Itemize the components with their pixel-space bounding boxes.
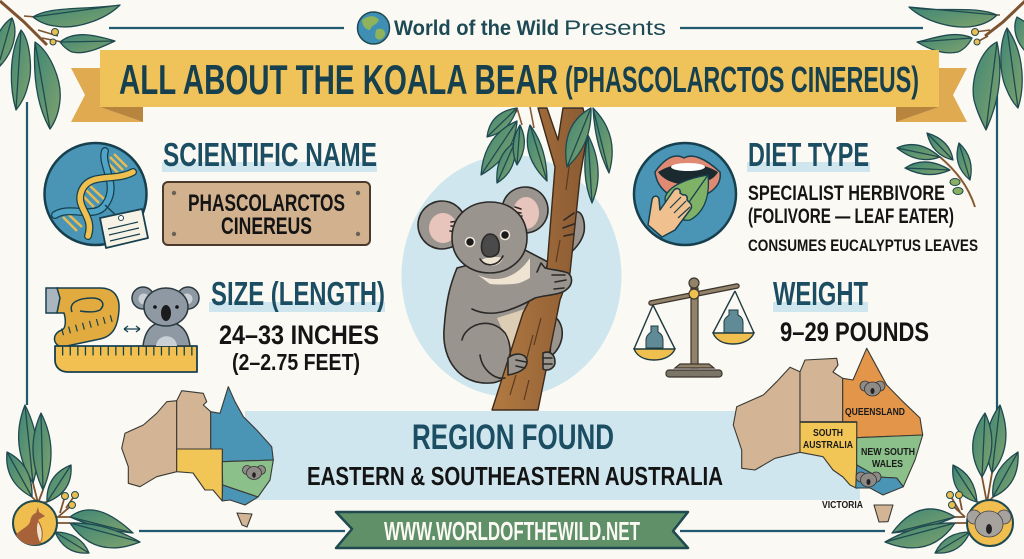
map: right Australia with state labels: VICTORIA (822, 500, 863, 511)
icon: globe (358, 12, 390, 44)
diet description: (FOLIVORE — LEAF EATER) (748, 205, 954, 228)
panel: weight (634, 275, 929, 377)
panel: size (46, 275, 385, 375)
name plaque: PHASCOLARCTOS (188, 190, 345, 217)
website banner (336, 512, 688, 548)
title text: ALL ABOUT THE KOALA BEAR (119, 56, 558, 103)
blue circle backdrop (402, 155, 622, 397)
icon: eucalyptus sprig (897, 133, 975, 207)
leaves: bottom left corner with kangaroo badge (7, 405, 140, 553)
size value: 24–33 INCHES (219, 320, 379, 350)
map: right Australia with state labels: QUEENSLAND (845, 407, 905, 418)
leaves: top right corner (909, 1, 1024, 130)
region text: REGION FOUND (412, 418, 614, 457)
diet description: SPECIALIST HERBIVORE (748, 182, 945, 205)
header: World of the Wild Presents (358, 12, 666, 44)
koala far limbs (550, 212, 584, 357)
map: right Australia with state labels: SOUTH (813, 428, 843, 439)
region band (245, 411, 860, 500)
panel: scientific name (44, 136, 377, 248)
central tree and koala (402, 107, 622, 410)
header: World of the Wild Presents: World of the Wild (394, 17, 559, 40)
icon: koala marker Victoria (856, 472, 881, 487)
koala chest (478, 258, 530, 352)
heading: SIZE (LENGTH) (211, 275, 385, 312)
diet description (748, 182, 978, 255)
region text (307, 418, 723, 491)
size value (219, 320, 379, 375)
map: left Australia (122, 387, 273, 527)
icon: mouth with leaf and hand (634, 143, 736, 245)
heading: SCIENTIFIC NAME (163, 136, 377, 173)
icon: balance scale (634, 278, 754, 377)
map: right Australia with state labels (733, 348, 923, 522)
name plaque (163, 182, 370, 245)
leaves behind trunk (481, 107, 547, 183)
weight value: 9–29 POUNDS (780, 317, 929, 347)
heading: WEIGHT (773, 275, 868, 312)
icon: DNA with tag (44, 143, 148, 248)
tree trunk (492, 108, 588, 410)
icon: koala badge (967, 500, 1013, 546)
map: right Australia with state labels: WALES (872, 459, 903, 470)
koala arm and feet (462, 213, 574, 378)
header: World of the Wild Presents: Presents (564, 17, 666, 40)
leaves: bottom right corner with koala badge (885, 405, 1018, 553)
koala body (444, 250, 548, 383)
leaves: top left corner (0, 1, 120, 129)
panel: diet type (634, 133, 978, 255)
title banner (71, 50, 967, 122)
heading: DIET TYPE (748, 136, 869, 173)
ribbon tails (71, 68, 967, 122)
koala head (418, 187, 548, 273)
website banner: WWW.WORLDOFTHEWILD.NET (384, 516, 640, 546)
icon: koala marker (242, 466, 266, 480)
region text: EASTERN & SOUTHEASTERN AUSTRALIA (307, 461, 723, 491)
icon: kangaroo badge (13, 501, 57, 545)
map: right Australia with state labels: AUSTRALIA (803, 440, 853, 451)
leaves in front of trunk (566, 108, 612, 203)
map: right Australia with state labels: NEW SOUTH (861, 447, 915, 458)
size value: (2–2.75 FEET) (232, 349, 360, 375)
name plaque: CINEREUS (221, 213, 312, 240)
icon: koala marker Queensland (860, 381, 885, 396)
icon: tape measure and koala (46, 287, 199, 372)
